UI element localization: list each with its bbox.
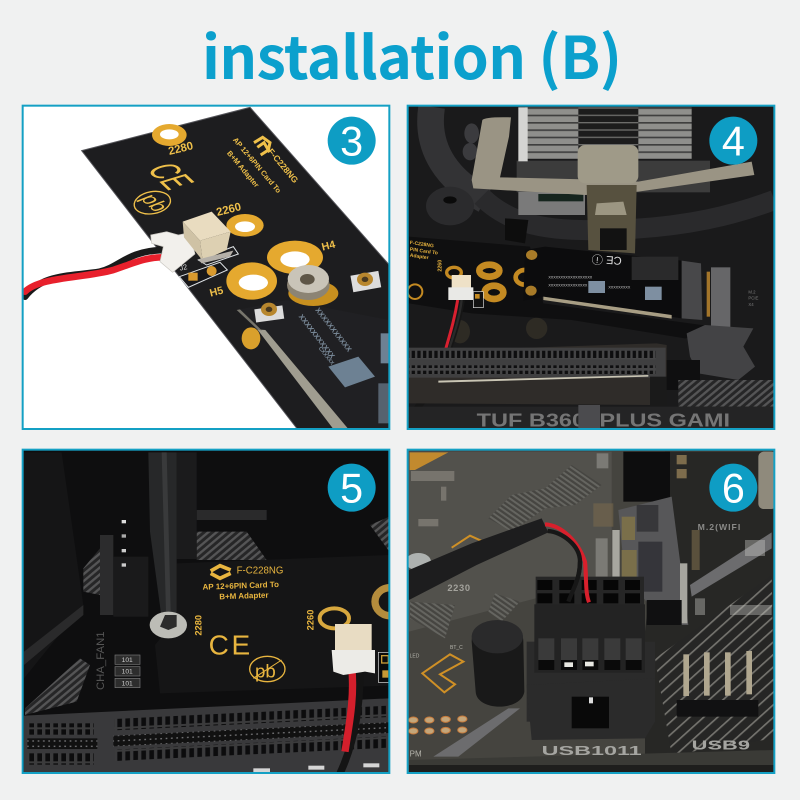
- connector outline and solder pads: [179, 247, 238, 287]
- Wi-Fi card: XXXXXXXXXXX: [313, 306, 354, 354]
- Wi-Fi card: XXXXXXXXXXX: [297, 312, 337, 360]
- board silkscreen labels: AP 12+6PIN Card To: [231, 136, 283, 195]
- adapter label text: [193, 565, 315, 681]
- washer: [150, 612, 187, 638]
- connector: [332, 624, 389, 682]
- Wi-Fi card: CXXXXX: [317, 346, 335, 367]
- light chevron strips: [433, 532, 772, 757]
- Wi-Fi card: [523, 247, 682, 319]
- rubber peg: [426, 187, 474, 225]
- motherboard standoffs: [450, 318, 547, 343]
- shrink tube cable: [409, 518, 548, 600]
- motherboard model text: [408, 405, 774, 430]
- PCIe slot: [409, 343, 700, 406]
- step badge 6: [709, 464, 757, 512]
- board silkscreen labels: CE: [138, 159, 204, 194]
- 2230 label: 2230: [447, 583, 471, 593]
- pb mark ring and logo: [132, 137, 270, 217]
- capacitor: [472, 620, 524, 707]
- gold pads: [408, 265, 534, 299]
- cooler fan ring: [431, 107, 774, 230]
- small silkscreen labels: BT_C: [450, 645, 463, 651]
- heatsink fins: [517, 107, 710, 215]
- Wi-Fi card: CE ⓘ: [591, 252, 622, 267]
- board stripes: [678, 380, 774, 407]
- fan header: [100, 520, 148, 617]
- adapter label text: F-C228NG: [237, 565, 283, 576]
- stripe fields: [410, 465, 774, 755]
- M.2 board label: X4: [748, 302, 754, 307]
- Wi-Fi card: XXXXXXXXXXXXXXXXXX: [548, 275, 593, 279]
- white plug: [448, 275, 483, 308]
- small silkscreen labels: PM: [410, 750, 422, 759]
- resistors: 101: [122, 669, 133, 676]
- M.2 socket: [612, 497, 688, 625]
- resistors: 101: [122, 657, 133, 664]
- Wi-Fi card: XXXXXXXXX: [608, 285, 631, 289]
- adapter text: Adapter: [409, 253, 429, 261]
- brown capacitors: [593, 455, 700, 570]
- cream header: [183, 212, 233, 263]
- step badge 4: [709, 117, 757, 165]
- header labels: USB1011: [542, 744, 642, 758]
- USB plug lower shroud: [527, 642, 655, 740]
- gold pads: [320, 588, 405, 628]
- panel: step 6 USB header connection: [406, 448, 776, 774]
- USB9 pin header: [677, 651, 758, 717]
- adapter label text: 2260: [305, 610, 315, 630]
- step badge 5: [328, 464, 376, 512]
- lighter board upper-left: [409, 452, 612, 632]
- adapter board: [155, 555, 389, 693]
- logo and pb ring: [211, 566, 285, 682]
- small silkscreen labels: [410, 645, 463, 759]
- step badge 6: 6: [722, 465, 745, 511]
- silver screw: [406, 553, 431, 570]
- M.2 board label: PCIE: [748, 295, 759, 300]
- adapter label text: pb: [255, 660, 276, 681]
- board silkscreen labels: B+M Adapter: [225, 149, 261, 189]
- white plug: [151, 232, 195, 272]
- board silkscreen labels: H5: [208, 285, 225, 300]
- M.2 dark housing: [623, 452, 670, 502]
- metal bracket: [472, 117, 754, 195]
- red and black wires: [545, 524, 589, 602]
- U.FL sockets: [254, 271, 381, 323]
- header labels: [542, 738, 750, 758]
- fan header label: CHA_FAN1: [95, 631, 107, 690]
- adapter label text: B+M Adapter: [219, 591, 269, 601]
- adapter label text: AP 12+6PIN Card To: [202, 580, 279, 592]
- USB plug upper body: [534, 562, 645, 673]
- Wi-Fi card: XXXXXXXXXXXXXXXX: [548, 284, 588, 288]
- left heat spreader: [24, 452, 83, 678]
- step badge 3: 3: [340, 118, 363, 164]
- Wi-Fi card: [237, 300, 389, 429]
- background stripes: [25, 452, 389, 715]
- power wires: [444, 300, 463, 348]
- board silkscreen labels: pb: [135, 191, 173, 215]
- resistors: 101: [122, 680, 133, 687]
- step badge 3: [328, 117, 376, 165]
- step badge 4: 4: [722, 118, 745, 164]
- panel: step 5 screw fastening: [22, 448, 390, 774]
- adapter text: PIN Card To: [409, 247, 438, 257]
- PCIe slots: [24, 698, 392, 774]
- board silkscreen labels: 2260: [215, 201, 243, 219]
- panel: step 3 adapter board: [22, 104, 390, 430]
- adapter text: 2260: [438, 260, 444, 272]
- gold pad under nut: [288, 284, 338, 306]
- title: installation (B): [202, 11, 622, 96]
- adapter text: [409, 240, 444, 272]
- top-right metal can: [758, 452, 777, 509]
- M.2 socket label: M.2(WIFI: [698, 522, 741, 532]
- board silkscreen labels: F-C228NG: [266, 147, 301, 185]
- adapter text: F-C228NG: [409, 240, 434, 249]
- motherboard model text: TUF B360 -PLUS GAMI: [477, 409, 730, 430]
- M.2 socket: [682, 261, 710, 320]
- solder pads: [409, 716, 467, 734]
- bracket stem: [587, 185, 637, 253]
- ring clips: [505, 218, 528, 243]
- shaft highlight: [162, 452, 171, 612]
- resistors: [115, 655, 140, 688]
- M.2 board label: M.2: [748, 289, 756, 294]
- board right dark area: [645, 452, 774, 760]
- adapter label text: 2280: [193, 615, 203, 636]
- board silkscreen labels: 2280: [167, 140, 195, 158]
- small silkscreen labels: LED: [410, 654, 420, 660]
- panel: step 4 motherboard install: [406, 104, 776, 430]
- power wires: [25, 250, 165, 297]
- small surface-mount parts: [596, 453, 772, 615]
- screwdriver shaft: [148, 452, 177, 627]
- standoff nut: [287, 265, 330, 300]
- adapter board: [82, 107, 389, 429]
- step badge 5: 5: [340, 465, 363, 511]
- connector outline and solder pads: J2: [179, 262, 188, 273]
- board silkscreen labels: [135, 136, 337, 300]
- board silkscreen labels: H4: [320, 239, 337, 254]
- bottom board edge: [409, 750, 774, 774]
- gold outline marks: [422, 536, 483, 692]
- top-left components: [411, 471, 454, 526]
- M.2 board label: [748, 290, 758, 306]
- adapter board: [409, 236, 703, 338]
- adapter label text: CE: [209, 629, 253, 660]
- foam pad and clip: [687, 267, 755, 380]
- top orange mark: [410, 452, 448, 470]
- header labels: USB9: [692, 738, 750, 752]
- gold mounting pads: [152, 124, 323, 349]
- power wires: [340, 667, 360, 773]
